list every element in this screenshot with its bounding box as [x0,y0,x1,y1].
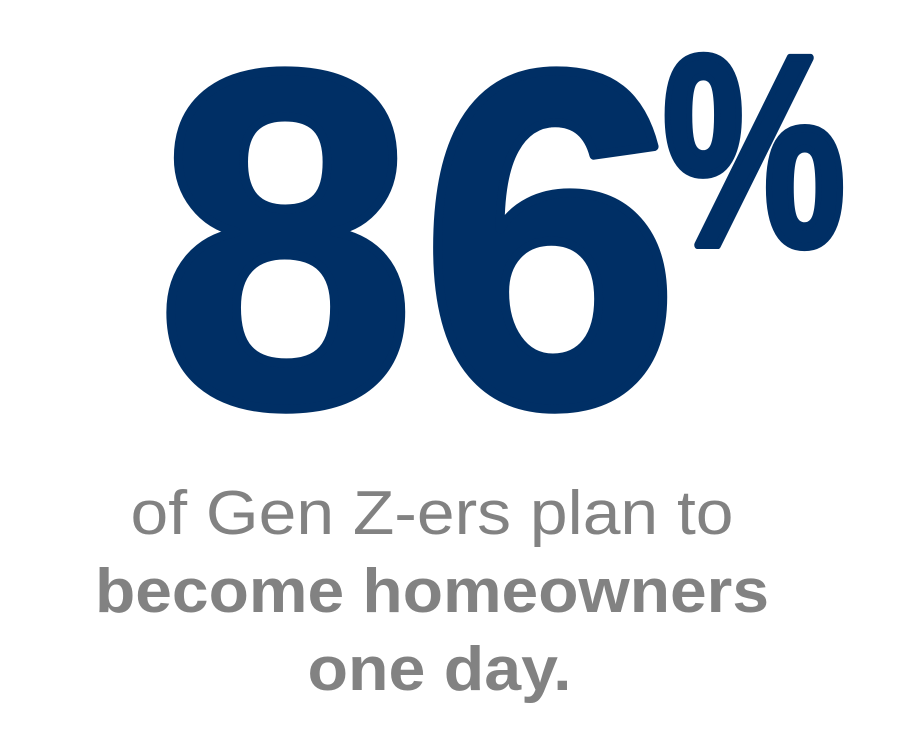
percent sign: % [662,0,846,303]
caption line 3: one day. [308,635,572,704]
headline figure: 86% [156,0,846,506]
caption line 1: of Gen Z-ers plan to [130,479,734,548]
caption text [95,479,769,704]
caption line 2: become homeowners [95,557,769,626]
